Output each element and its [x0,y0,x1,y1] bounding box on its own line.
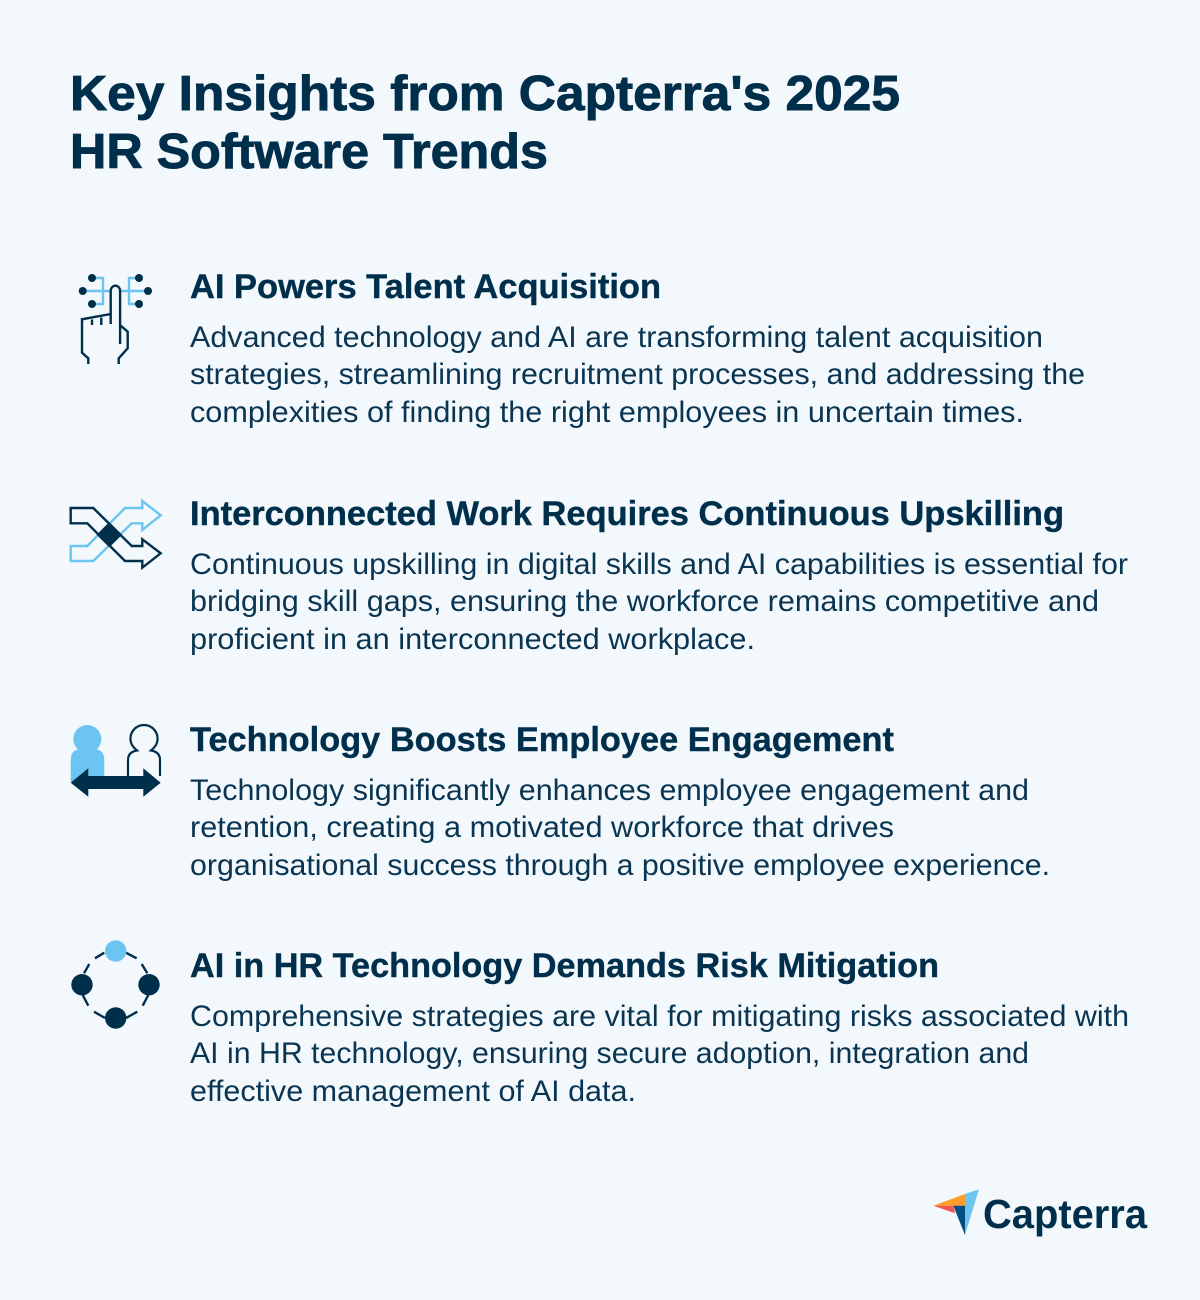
title: HR Software Trends [70,125,548,179]
text block: organisational success through a positive employee experience. [190,849,1050,882]
logo: Capterra: Capterra [983,1191,1148,1237]
text block [190,1000,1129,1108]
text block: strategies, streamlining recruitment processes, and addressing the [190,358,1085,391]
heading: AI Powers Talent Acquisition [190,268,661,306]
panel: interconnected work [71,495,1128,656]
text block: Technology significantly enhances employee engagement and [190,774,1029,807]
icon: crossing arrows [71,501,161,568]
icon: two people with arrow [71,725,161,797]
text block: Advanced technology and AI are transforming talent acquisition [190,321,1043,354]
panel: technology boosts engagement [71,721,1050,882]
text block: Comprehensive strategies are vital for mitigating risks associated with [190,1000,1129,1033]
heading: Technology Boosts Employee Engagement [190,721,894,759]
icon: circular nodes [71,940,160,1029]
text block: retention, creating a motivated workforce that drives [190,811,894,844]
title: Key Insights from Capterra's 2025 [70,67,900,121]
text block [190,548,1128,656]
text block: AI in HR technology, ensuring secure adoption, integration and [190,1037,1029,1070]
text block: proficient in an interconnected workplace. [190,623,755,656]
text block [190,321,1085,429]
heading: AI in HR Technology Demands Risk Mitigation [190,947,939,985]
text block: complexities of finding the right employees in uncertain times. [190,396,1024,429]
icon: hand touching network [79,274,152,364]
text block: Continuous upskilling in digital skills and AI capabilities is essential for [190,548,1128,581]
panel: AI risk mitigation [71,940,1129,1108]
title [70,67,900,179]
text block: effective management of AI data. [190,1075,636,1108]
text block [190,774,1050,882]
panel: AI powers talent acquisition [79,268,1085,429]
heading: Interconnected Work Requires Continuous Upskilling [190,495,1064,533]
text block: bridging skill gaps, ensuring the workforce remains competitive and [190,585,1099,618]
